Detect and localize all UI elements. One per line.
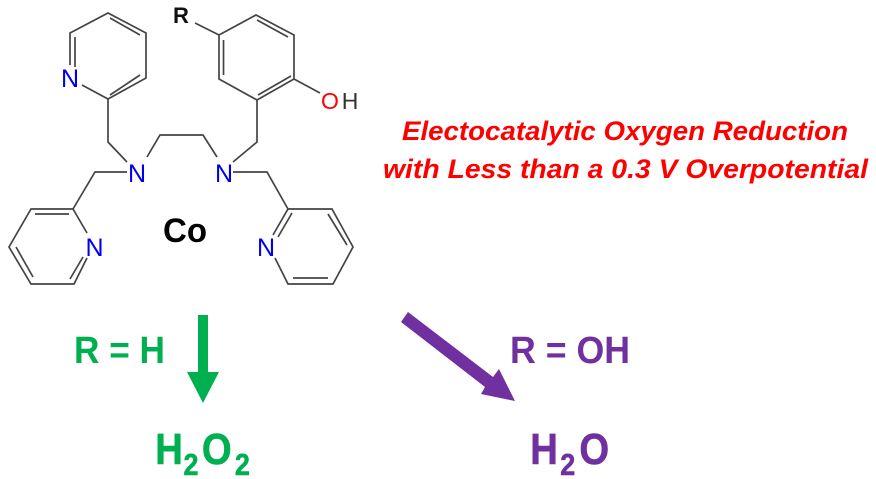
- atom labels: [61, 3, 358, 262]
- headline: oxygen reduction: [383, 116, 869, 184]
- atom labels: H: [342, 88, 358, 114]
- atom labels: N: [257, 234, 275, 262]
- atom labels: O: [321, 88, 339, 114]
- pyridine ring: top left: [70, 13, 146, 99]
- atom labels: N: [85, 234, 104, 262]
- molecule: cobalt ligand structure: [9, 3, 358, 284]
- metal label: Co: Co: [163, 212, 207, 250]
- headline: oxygen reduction: with Less than a 0.3 V Overpotential: [383, 154, 869, 184]
- atom labels: N: [128, 160, 146, 188]
- pyridine ring: bottom left: [9, 209, 87, 284]
- purple label: R = OH: R = OH: [510, 330, 630, 372]
- green product: H2O2: [155, 425, 250, 479]
- green product: H2O2: O: [202, 425, 232, 474]
- atom labels: N: [61, 65, 79, 93]
- headline: oxygen reduction: Electocatalytic Oxygen Reduction: [402, 116, 848, 146]
- phenol ring with R and OH bonds: [195, 15, 320, 100]
- purple product: H2O: H: [530, 425, 558, 474]
- atom labels: N: [215, 160, 233, 188]
- linker bonds: [73, 99, 288, 209]
- purple arrow: [401, 312, 515, 401]
- purple product: H2O: [530, 425, 609, 479]
- atom labels: R: [173, 3, 189, 28]
- green product: H2O2: H: [155, 425, 183, 474]
- green arrow: [187, 315, 219, 403]
- purple product: H2O: O: [579, 425, 609, 474]
- green label: R = H: R = H: [74, 330, 165, 372]
- pyridine ring: bottom right: [273, 209, 353, 284]
